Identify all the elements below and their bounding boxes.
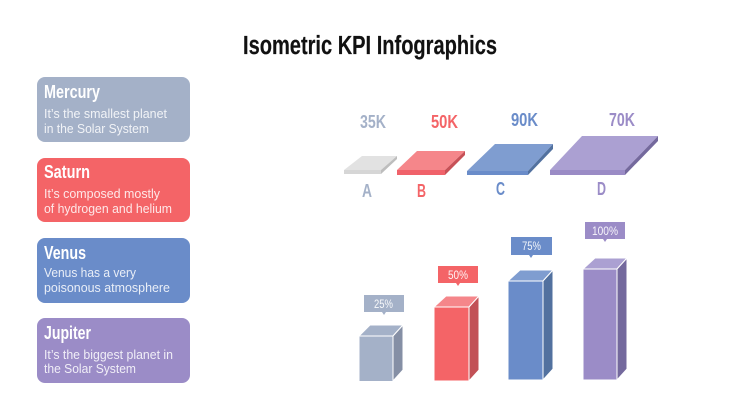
panel: Jupiter: Jupiter — [44, 323, 91, 343]
panel: Venus: Venus has a very — [44, 266, 137, 280]
KPI D: 70K slab: 70K — [609, 109, 635, 130]
KPI D: 70K slab: D — [597, 178, 606, 199]
panel: Saturn: Saturn — [44, 162, 90, 182]
panel: Venus: poisonous atmosphere — [44, 281, 170, 295]
panel: Mercury: It’s the smallest planet — [44, 107, 168, 121]
bar: 100% — [583, 222, 627, 380]
KPI A: 35K slab: 35K — [360, 111, 386, 132]
bar: 50% — [434, 266, 479, 381]
KPI D: 70K slab — [550, 109, 658, 199]
KPI B: 50K slab: 50K — [431, 111, 458, 132]
panel: Venus — [37, 238, 190, 303]
bar: 100%: 100% — [592, 224, 618, 238]
KPI A: 35K slab — [344, 111, 397, 201]
bar: 50%: 50% — [448, 268, 468, 282]
bar: 75%: 75% — [522, 239, 541, 253]
panel: Mercury — [37, 77, 190, 142]
panel: Jupiter: the Solar System — [44, 362, 136, 376]
bar: 25% — [359, 295, 404, 382]
panel: Saturn — [37, 158, 190, 222]
panel: Saturn: of hydrogen and helium — [44, 202, 172, 216]
KPI A: 35K slab: A — [362, 180, 372, 201]
panel: Jupiter: It’s the biggest planet in — [44, 348, 173, 362]
panel: Mercury: Mercury — [44, 82, 100, 102]
KPI B: 50K slab: B — [417, 180, 426, 201]
title: Isometric KPI Infographics — [243, 32, 497, 60]
bar: 25%: 25% — [374, 297, 393, 311]
KPI C: 90K slab — [467, 109, 553, 199]
bar: 75% — [508, 237, 553, 380]
panel: Venus: Venus — [44, 243, 86, 263]
KPI C: 90K slab: C — [496, 178, 505, 199]
panel: Jupiter — [37, 318, 190, 383]
KPI C: 90K slab: 90K — [511, 109, 538, 130]
panel: Mercury: in the Solar System — [44, 122, 149, 136]
panel: Saturn: It’s composed mostly — [44, 187, 161, 201]
KPI B: 50K slab — [397, 111, 465, 201]
